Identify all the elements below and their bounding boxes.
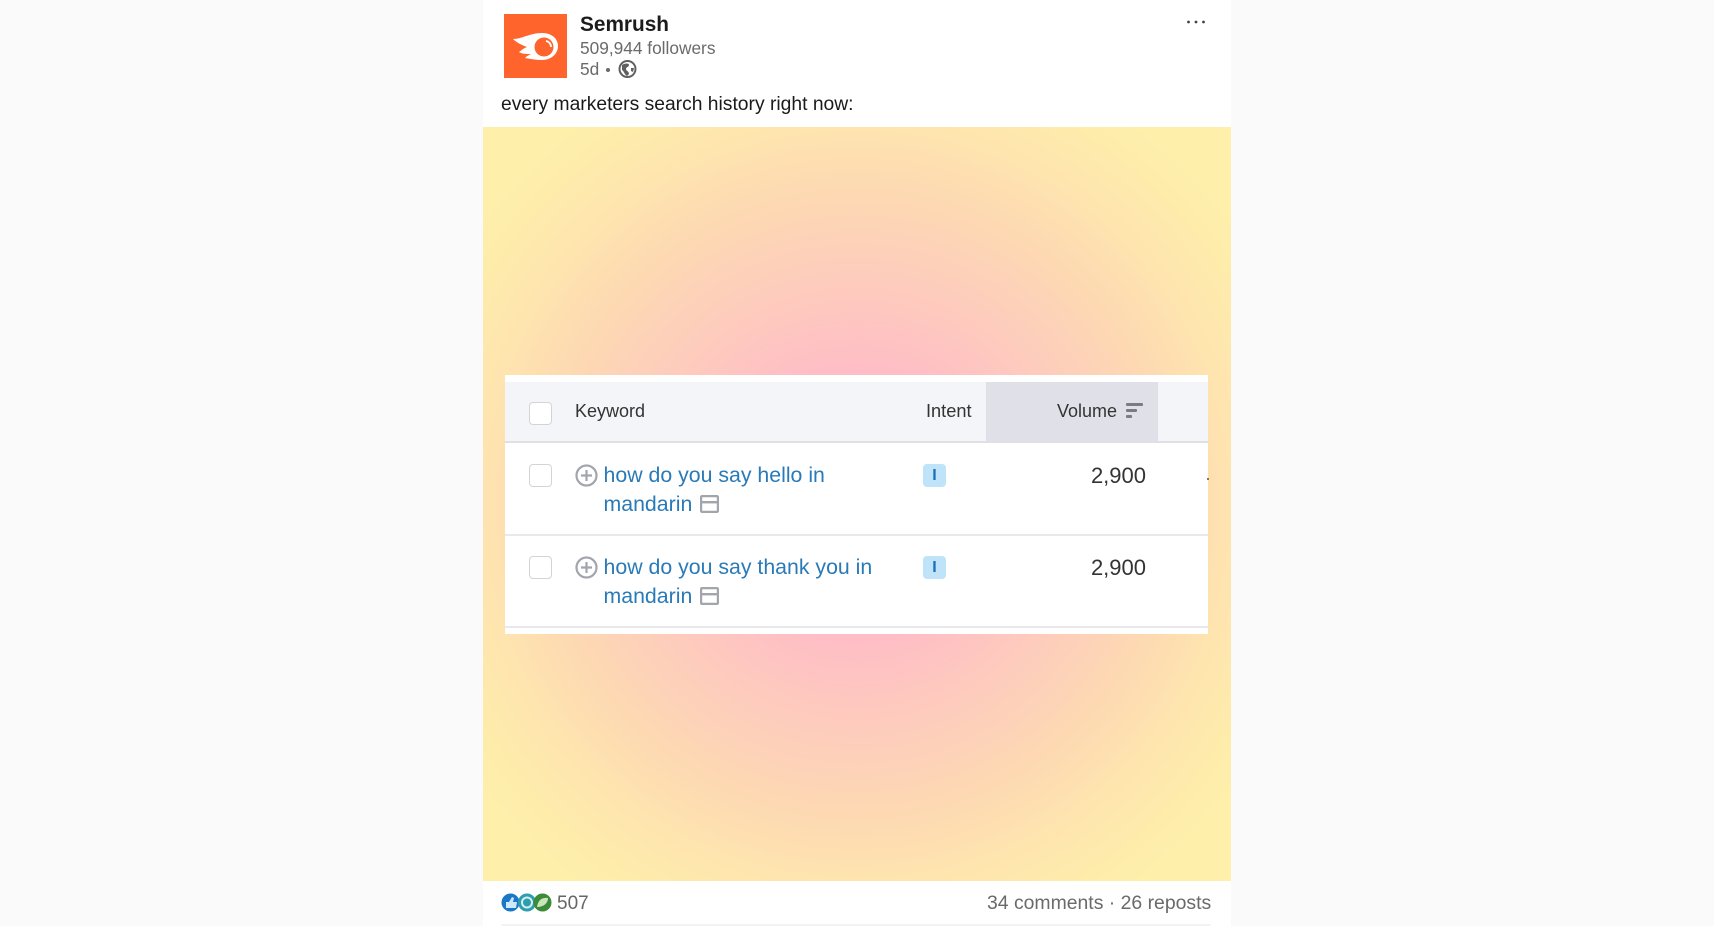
post age: 5d xyxy=(580,59,599,79)
table header row xyxy=(505,382,1208,443)
table bottom divider xyxy=(505,626,1208,628)
separator dot xyxy=(606,68,610,72)
row 2 add icon xyxy=(575,556,598,579)
row 2 serp icon xyxy=(700,587,719,605)
post text: every marketers search history right now: xyxy=(501,94,854,115)
row 1 xyxy=(529,463,1146,516)
row 1 volume: 2,900 xyxy=(1091,463,1146,488)
row 2 keyword: how do you say thank you in xyxy=(604,555,872,579)
post card xyxy=(483,0,1231,926)
keyword table xyxy=(505,375,1208,634)
row 1 checkbox xyxy=(529,464,552,487)
row 1 keyword second line: mandarin xyxy=(604,492,692,516)
company name: Semrush xyxy=(580,13,669,36)
header: Intent: Intent xyxy=(926,401,972,421)
row 2 xyxy=(529,555,1146,608)
row 2 keyword second line: mandarin xyxy=(604,584,692,608)
footer divider xyxy=(501,924,1211,926)
comments and reposts: 34 comments · 26 reposts xyxy=(987,892,1211,914)
row 2 intent badge: I xyxy=(932,559,937,576)
header: Volume: Volume xyxy=(1057,401,1117,421)
more menu xyxy=(1187,20,1205,24)
cut-off cell mark xyxy=(1207,478,1208,480)
row divider xyxy=(505,534,1208,536)
header: Keyword: Keyword xyxy=(575,401,645,421)
row 1 keyword: how do you say hello in xyxy=(604,463,825,487)
reaction count: 507 xyxy=(557,893,589,914)
row 2 checkbox xyxy=(529,556,552,579)
row 1 intent badge: I xyxy=(932,467,937,484)
row 1 intent badge xyxy=(923,464,946,487)
followers count: 509,944 followers xyxy=(580,38,715,58)
row 2 intent badge xyxy=(923,556,946,579)
icons: reactions xyxy=(502,894,552,912)
row 2 volume: 2,900 xyxy=(1091,555,1146,580)
row 1 add icon xyxy=(575,464,598,487)
icon: sort xyxy=(1126,403,1143,418)
row 1 serp icon xyxy=(700,495,719,513)
header checkbox xyxy=(529,402,552,425)
icon: globe xyxy=(618,60,636,78)
gradient image panel xyxy=(483,127,1231,881)
logo: Semrush xyxy=(504,14,567,78)
volume column highlight xyxy=(986,382,1158,441)
